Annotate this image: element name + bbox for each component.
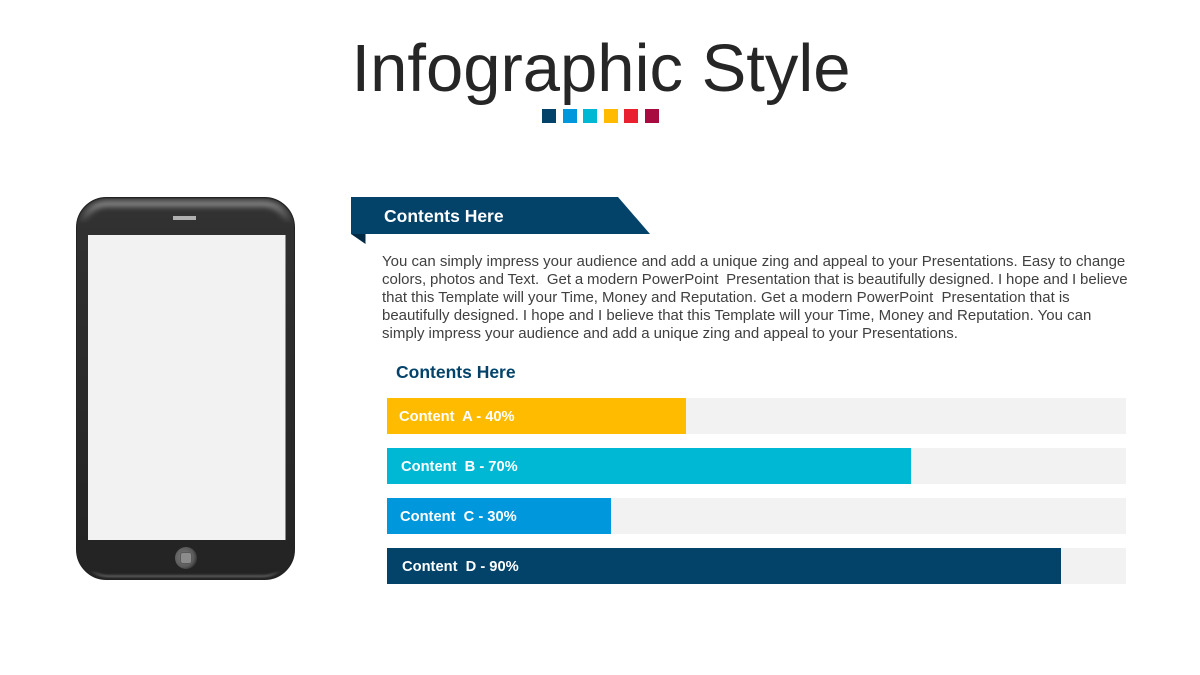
bar chart: [387, 398, 1126, 584]
speaker: [173, 216, 196, 220]
body paragraph: that this Template will your Time, Money and Reputation. Get a modern PowerPoint Presentation that is: [382, 289, 1070, 306]
bar: Content B: [387, 448, 1126, 484]
bar: Content D: [387, 548, 1126, 584]
body paragraph: beautifully designed. I hope and I believe that this Template will your Time, Money and Reputation. You can: [382, 307, 1091, 324]
icon: smartphone: [76, 197, 295, 580]
colour squares row: [542, 109, 659, 123]
body paragraph: You can simply impress your audience and add a unique zing and appeal to your Presentations. Easy to change: [382, 253, 1125, 270]
bar: Content A: Content A - 40%: [399, 408, 515, 424]
title: Infographic Style: [351, 31, 851, 106]
body paragraph: colors, photos and Text. Get a modern PowerPoint Presentation that is beautifully designed. I hope and I believe: [382, 271, 1128, 288]
home button: [175, 547, 197, 569]
chart heading: Contents Here: [396, 362, 516, 382]
banner ribbon: [351, 197, 650, 244]
banner heading: Contents Here: [384, 206, 504, 226]
body paragraph: simply impress your audience and add a unique zing and appeal to your Presentations.: [382, 325, 958, 342]
bar: Content C: Content C - 30%: [400, 508, 517, 524]
bar: Content D: Content D - 90%: [402, 558, 519, 574]
bar: Content A: [387, 398, 1126, 434]
bar: Content B: Content B - 70%: [401, 458, 518, 474]
body paragraph: [382, 253, 1128, 342]
bar: Content C: [387, 498, 1126, 534]
screen: [88, 235, 286, 540]
